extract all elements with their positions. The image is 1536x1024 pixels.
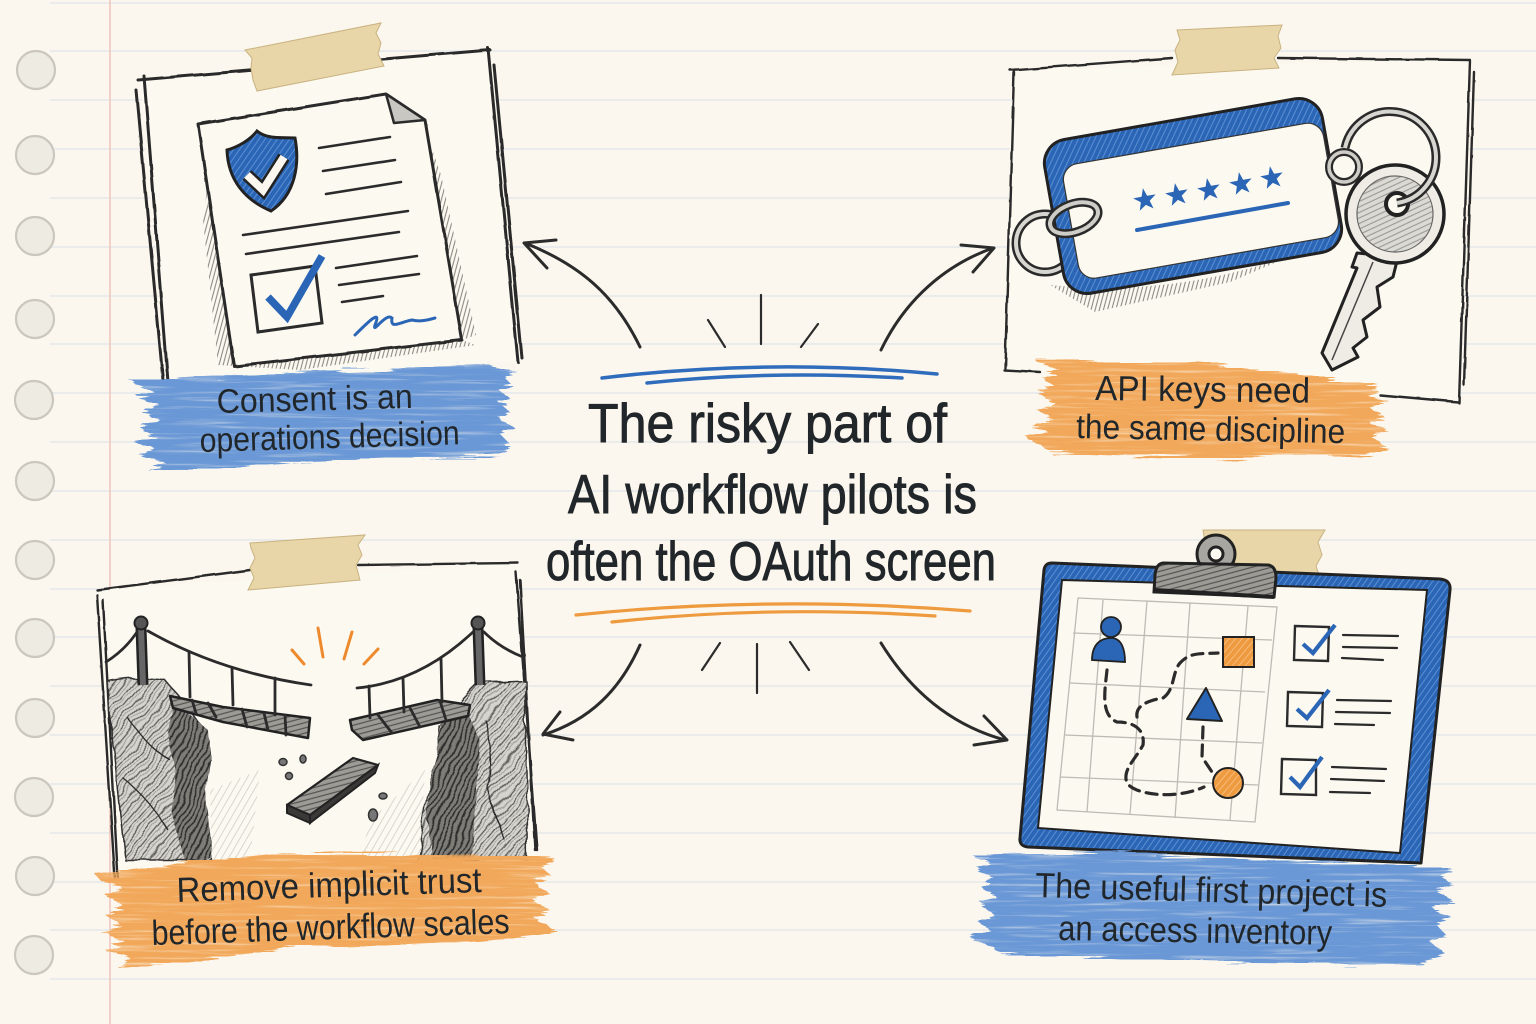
panel: access inventory clipboard: [970, 530, 1453, 964]
orange circle: [1213, 768, 1243, 798]
arrow to consent panel: [524, 240, 640, 347]
person icon: [1092, 617, 1125, 662]
panel frame: [1004, 58, 1474, 403]
caption text: [1035, 866, 1388, 953]
background hatch: [210, 770, 425, 860]
falling debris: [279, 755, 387, 821]
caption text: [199, 378, 460, 460]
arrow to bridge panel: [543, 645, 640, 740]
caption text: the same discipline: [1076, 408, 1346, 451]
fallen plank: [287, 758, 378, 823]
key tag left ring: [1016, 214, 1074, 272]
caption text: Consent is an: [216, 378, 413, 421]
title: [546, 392, 996, 592]
left bridge span: [106, 616, 311, 738]
masked password stars: [1132, 164, 1285, 212]
panel: API key tag: [1004, 25, 1474, 458]
caption text: operations decision: [199, 414, 460, 460]
caption text: [1076, 369, 1346, 451]
icon: consent checkbox: [251, 256, 322, 332]
right bridge span: [350, 616, 523, 740]
clipboard clip: [1154, 535, 1276, 597]
caption text: an access inventory: [1058, 909, 1333, 953]
left cliff: [107, 678, 212, 860]
orange snap rays: [292, 628, 378, 664]
orange square: [1223, 637, 1254, 667]
map grid: [1057, 598, 1277, 822]
caption text: [151, 861, 510, 953]
caption text: before the workflow scales: [151, 902, 510, 953]
washi tape: [245, 23, 384, 91]
icon: shield with check: [227, 131, 297, 211]
panel: consent document: [128, 23, 522, 472]
washi tape: [248, 535, 365, 590]
washi tape: [1203, 530, 1325, 578]
key ring: [1345, 112, 1436, 203]
tag link ring: [1046, 196, 1102, 240]
central message: [524, 240, 1007, 745]
key tag: [1041, 95, 1345, 297]
right link ring: [1329, 152, 1359, 182]
panel: broken bridge: [94, 535, 557, 968]
clipboard board: [1020, 563, 1450, 863]
blue triangle: [1187, 688, 1222, 721]
key tag shadow: [1050, 235, 1340, 312]
document sheet: [198, 94, 476, 370]
washi tape: [1172, 25, 1282, 75]
caption text: API keys need: [1095, 369, 1310, 411]
signature: [355, 317, 435, 335]
caption text: The useful first project is: [1035, 866, 1388, 915]
panel frame: [97, 563, 537, 880]
arrow to clipboard panel: [881, 643, 1007, 745]
title: The risky part of: [588, 392, 948, 454]
arrow to API key panel: [881, 245, 994, 350]
password underline: [1137, 203, 1288, 230]
panel frame: [136, 48, 522, 385]
bottom emphasis ticks: [702, 642, 809, 693]
blue underline strokes: [602, 367, 937, 383]
caption banner: access inventory: [970, 853, 1453, 964]
document text lines: [243, 137, 419, 302]
title: AI workflow pilots is: [568, 463, 977, 525]
caption banner: API keys: [1026, 360, 1390, 458]
caption text: Remove implicit trust: [176, 861, 482, 910]
orange underline strokes: [576, 604, 970, 622]
top emphasis ticks: [708, 295, 818, 347]
caption banner: implicit trust: [94, 852, 557, 968]
dashed route: [1105, 653, 1218, 795]
right cliff: [417, 680, 528, 860]
title: often the OAuth screen: [546, 530, 996, 592]
checklist: [1281, 625, 1398, 795]
caption banner: consent: [128, 366, 518, 472]
key: [1322, 165, 1444, 370]
binder punch holes: [15, 51, 55, 974]
